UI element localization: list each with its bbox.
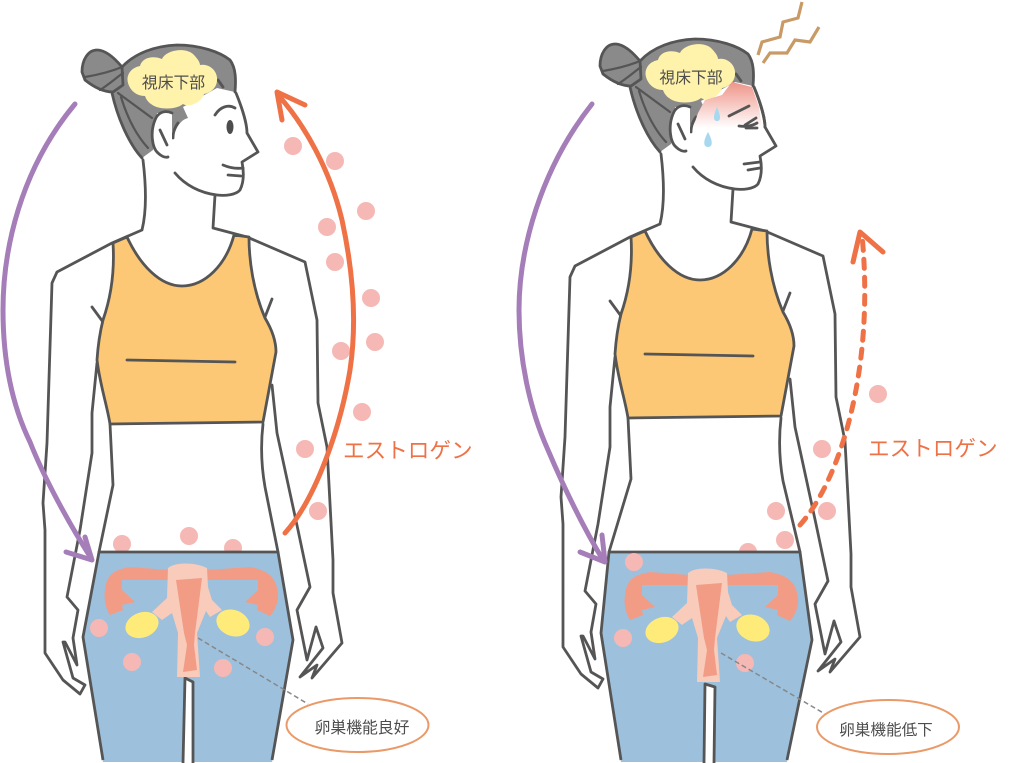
right figure: stressed <box>519 2 998 763</box>
face details: right <box>729 87 765 170</box>
purple arrow: right <box>519 104 605 562</box>
stress zigzag <box>758 2 819 63</box>
callout: ovarian function good <box>198 638 428 752</box>
estrogen label: right: エストロゲン <box>868 436 998 461</box>
callout: ovarian function decline: 卵巣機能低下 <box>839 721 933 739</box>
waist: left <box>99 424 278 552</box>
body upper: left <box>43 45 342 694</box>
estrogen dots above waist <box>113 137 384 557</box>
dashed orange arrow: weak estrogen <box>800 232 883 525</box>
shorts: right <box>601 552 812 763</box>
reproductive organs: right <box>625 568 798 682</box>
shorts: left <box>83 552 293 763</box>
estrogen label: left: エストロゲン <box>343 438 473 463</box>
purple arrow: left <box>3 104 92 560</box>
callout: ovarian function good: 卵巣機能良好 <box>315 719 410 737</box>
estrogen dots: right above waist <box>739 385 887 561</box>
estrogen dots on shorts: right <box>614 553 754 672</box>
left figure: healthy <box>3 45 473 763</box>
face details: left <box>215 106 243 176</box>
waist: right <box>609 418 800 552</box>
forehead flush <box>693 82 762 128</box>
hypothalamus label: right: 視床下部 <box>659 69 723 87</box>
body upper: right <box>561 39 860 688</box>
orange arrow: strong estrogen <box>277 92 354 533</box>
estrogen dots on shorts <box>90 619 274 677</box>
reproductive organs: left <box>105 564 278 677</box>
sweat drops <box>704 107 720 147</box>
callout: ovarian function decline <box>721 653 959 754</box>
hypothalamus label: 視床下部 <box>142 74 205 92</box>
